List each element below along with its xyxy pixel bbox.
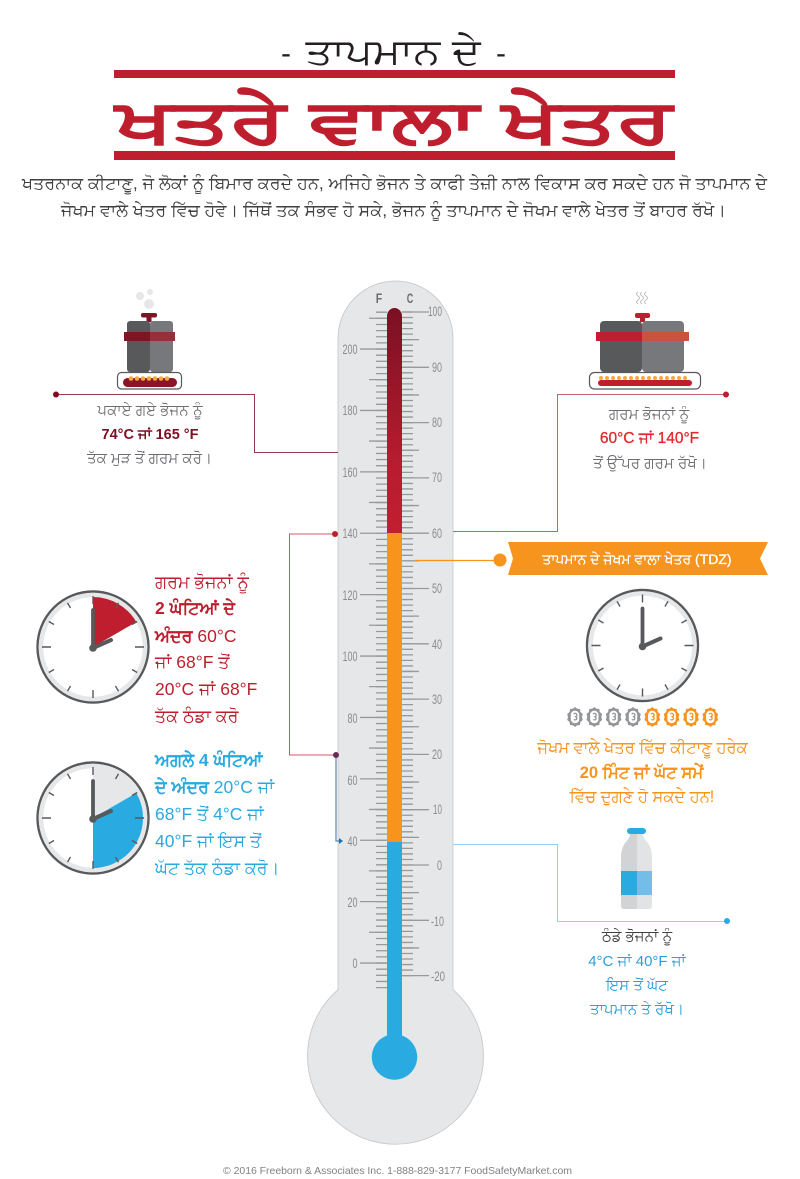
text: germs double every 20 minutes: ਜੋਖਮ ਵਾਲੇ ਖੇਤਰ ਵਿੱਚ ਕੀਟਾਣੂ ਹਰੇਕ xyxy=(536,739,749,758)
text: cool within 2 hours: ਤੱਕ ਠੰਡਾ ਕਰੋ xyxy=(154,706,240,726)
fahrenheit labels: 20 xyxy=(348,894,358,910)
celsius labels: 10 xyxy=(433,801,442,817)
title: top line: ਤਾਪਮਾਨ ਦੇ xyxy=(304,31,482,72)
arrow: down to 40F xyxy=(333,752,343,844)
celsius labels: -20 xyxy=(431,968,445,984)
thermometer body xyxy=(308,281,484,1144)
fahrenheit labels: 160 xyxy=(342,464,358,480)
scale headers F and C: C xyxy=(407,290,413,306)
text: cool within next 4 hours: ਦੇ ਅੰਦਰ 20°C ਜਾਂ xyxy=(154,776,275,797)
icons: germs doubling row xyxy=(567,707,718,727)
celsius tick marks xyxy=(408,311,416,977)
text: cool within next 4 hours: ਅਗਲੇ 4 ਘੰਟਿਆਂ xyxy=(154,749,264,770)
blue zone of tube and bulb xyxy=(372,842,417,1080)
text: keep cold food xyxy=(588,927,687,1018)
celsius labels: 0 xyxy=(437,857,442,873)
text: cool within next 4 hours: 68°F ਤੋਂ 4°C ਜਾਂ xyxy=(155,804,265,824)
fahrenheit labels: 0 xyxy=(352,955,358,971)
text: cool within 2 hours xyxy=(154,572,257,726)
text: cooked food: 74°C ਜਾਂ 165 °F xyxy=(102,426,199,443)
celsius labels: -10 xyxy=(431,913,444,929)
celsius labels: 70 xyxy=(432,469,442,485)
icon: milk bottle xyxy=(621,828,652,909)
text: cool within next 4 hours xyxy=(154,749,279,878)
text: keep cold food: ਠੰਡੇ ਭੋਜਨਾਂ ਨੂੰ xyxy=(601,927,672,946)
fahrenheit labels: 60 xyxy=(348,772,358,788)
icon: large pot with steam xyxy=(590,292,700,389)
text: cool within 2 hours: ਅੰਦਰ 60°C xyxy=(154,625,236,646)
text: cooked food: ਤੱਕ ਮੁੜ ਤੋਂ ਗਰਮ ਕਰੋ। xyxy=(86,450,212,467)
celsius labels: 100 xyxy=(428,303,442,319)
fahrenheit labels: 40 xyxy=(348,833,358,849)
fahrenheit tick marks xyxy=(374,312,382,990)
title: top line: - xyxy=(496,37,506,70)
icon: clock at two o'clock xyxy=(587,590,698,701)
icon: clock with red two-hour sector xyxy=(38,592,148,702)
text: cool within next 4 hours: ਘੱਟ ਤੱਕ ਠੰਡਾ ਕਰੋ। xyxy=(154,858,279,878)
title: top line xyxy=(281,31,506,72)
banner: temperature danger zone: ਤਾਪਮਾਨ ਦੇ ਜੋਖਮ ਵਾਲਾ ਖੇਤਰ (TDZ) xyxy=(541,551,732,567)
fahrenheit labels xyxy=(342,341,358,971)
celsius labels: 50 xyxy=(432,580,442,596)
footer: © 2016 Freeborn & Associates Inc. 1-888-829-3177 FoodSafetyMarket.com xyxy=(223,1165,572,1177)
text: cool within 2 hours: ਗਰਮ ਭੋਜਨਾਂ ਨੂੰ xyxy=(154,572,249,593)
celsius labels: 80 xyxy=(432,414,442,430)
connector: cooked food xyxy=(53,392,338,452)
banner: temperature danger zone xyxy=(508,542,768,575)
text: hot food: ਤੋਂ ਉੱਪਰ ਗਰਮ ਰੱਖੋ। xyxy=(592,455,707,472)
text: keep cold food: ਇਸ ਤੋਂ ਘੱਟ xyxy=(605,977,668,994)
scale headers F and C xyxy=(376,290,413,306)
fahrenheit labels: 120 xyxy=(342,587,358,603)
connector: cooling bracket xyxy=(290,531,338,755)
fahrenheit labels: 80 xyxy=(348,710,358,726)
orange danger zone of tube xyxy=(387,533,402,842)
icon: small pot with steam bubbles xyxy=(118,289,182,389)
celsius labels: 40 xyxy=(432,636,442,652)
text: keep cold food: 4°C ਜਾਂ 40°F ਜਾਂ xyxy=(588,953,687,970)
text: germs double every 20 minutes xyxy=(536,739,749,806)
intro text xyxy=(21,174,768,221)
title: red banner heading: ਖਤਰੇ ਵਾਲਾ ਖੇਤਰ xyxy=(113,88,675,155)
text: cooked food xyxy=(86,401,212,467)
text: germs double every 20 minutes: ਵਿੱਚ ਦੁਗਣੇ ਹੋ ਸਕਦੇ ਹਨ! xyxy=(569,788,714,806)
text: cool within 2 hours: 20°C ਜਾਂ 68°F xyxy=(155,679,257,699)
text: hot food: 60°C ਜਾਂ 140°F xyxy=(600,430,699,447)
title: red banner heading xyxy=(113,70,675,160)
scale headers F and C: F xyxy=(376,290,383,306)
connector: danger zone xyxy=(415,554,506,566)
celsius labels: 20 xyxy=(432,746,442,762)
text: hot food: ਗਰਮ ਭੋਜਨਾਂ ਨੂੰ xyxy=(608,405,689,424)
celsius labels xyxy=(428,303,445,984)
intro text: ਖਤਰਨਾਕ ਕੀਟਾਣੂ, ਜੋ ਲੋਕਾਂ ਨੂੰ ਬਿਮਾਰ ਕਰਦੇ ਹਨ, ਅਜਿਹੇ ਭੋਜਨ ਤੇ ਕਾਫੀ ਤੇਜ਼ੀ ਨਾਲ ਵਿਕਾਸ ਕਰ ਸਕਦੇ ਹਨ ਜੋ ਤਾਪਮਾਨ ਦੇ xyxy=(21,174,768,194)
celsius labels: 90 xyxy=(432,359,442,375)
text: keep cold food: ਤਾਪਮਾਨ ਤੇ ਰੱਖੋ। xyxy=(589,1001,684,1018)
fahrenheit labels: 200 xyxy=(342,341,358,357)
text: cool within 2 hours: ਜਾਂ 68°F ਤੋਂ xyxy=(154,652,230,672)
icon: clock with blue four-hour sector xyxy=(38,762,148,874)
text: cooked food: ਪਕਾਏ ਗਏ ਭੋਜਨ ਨੂੰ xyxy=(96,401,203,420)
title: top line: - xyxy=(281,37,291,70)
connector: cold food xyxy=(453,844,730,924)
red zone of tube xyxy=(387,308,402,533)
fahrenheit labels: 180 xyxy=(342,402,358,418)
celsius labels: 30 xyxy=(432,691,442,707)
celsius labels: 60 xyxy=(432,525,442,541)
text: cool within next 4 hours: 40°F ਜਾਂ ਇਸ ਤੋਂ xyxy=(155,831,262,851)
intro text: ਜੋਖਮ ਵਾਲੇ ਖੇਤਰ ਵਿੱਚ ਹੋਵੇ। ਜਿੱਥੋਂ ਤਕ ਸੰਭਵ ਹੋ ਸਕੇ, ਭੋਜਨ ਨੂੰ ਤਾਪਮਾਨ ਦੇ ਜੋਖਮ ਵਾਲੇ ਖੇਤਰ ਤੋਂ ਬਾਹਰ ਰੱਖੋ। xyxy=(60,201,726,221)
connector: hot food xyxy=(453,392,729,532)
text: hot food xyxy=(592,405,707,472)
text: cool within 2 hours: 2 ਘੰਟਿਆਂ ਦੇ xyxy=(155,597,236,618)
text: germs double every 20 minutes: 20 ਮਿੰਟ ਜਾਂ ਘੱਟ ਸਮੇਂ xyxy=(580,762,704,782)
thermometer xyxy=(308,281,484,1144)
fahrenheit labels: 100 xyxy=(342,648,358,664)
fahrenheit labels: 140 xyxy=(342,525,358,541)
